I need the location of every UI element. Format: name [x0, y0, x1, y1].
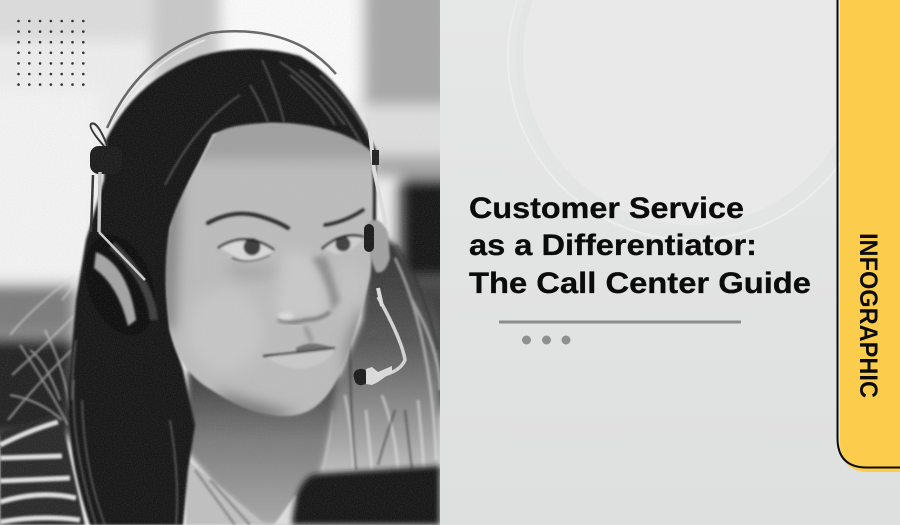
- wispy hair on the left: [6, 285, 74, 426]
- yellow infographic tab: [838, 0, 900, 472]
- hair: [68, 49, 376, 525]
- photo: woman wearing call center headset: [0, 0, 460, 525]
- monitor: [292, 466, 440, 525]
- three dots: [522, 336, 570, 344]
- long hair on the right: [310, 230, 440, 480]
- photo background blurred office: [0, 0, 460, 438]
- title: [469, 192, 811, 300]
- tab label: INFOGRAPHIC: [854, 233, 882, 398]
- title: as a Differentiator:: [469, 229, 757, 262]
- headset: [72, 31, 405, 387]
- headband slider left: [91, 123, 107, 146]
- film grain: [0, 0, 440, 525]
- left ear cup: [86, 235, 154, 335]
- headband: [107, 31, 336, 128]
- collar: [186, 458, 302, 525]
- striped shirt: [0, 412, 85, 525]
- panel: title background: [507, 0, 840, 241]
- nose: [275, 250, 340, 322]
- right headset arm: [368, 115, 386, 225]
- dot grid: [17, 20, 85, 86]
- lips: [263, 326, 335, 369]
- brows: [208, 210, 363, 228]
- divider line: [499, 320, 741, 324]
- microphone boom: [378, 297, 405, 376]
- neck: [186, 370, 340, 525]
- hair highlights: [72, 60, 370, 525]
- eyes: [218, 236, 364, 261]
- face shading: [165, 122, 371, 416]
- title: The Call Center Guide: [469, 267, 811, 300]
- title: Customer Service: [469, 192, 744, 225]
- face: [164, 121, 374, 417]
